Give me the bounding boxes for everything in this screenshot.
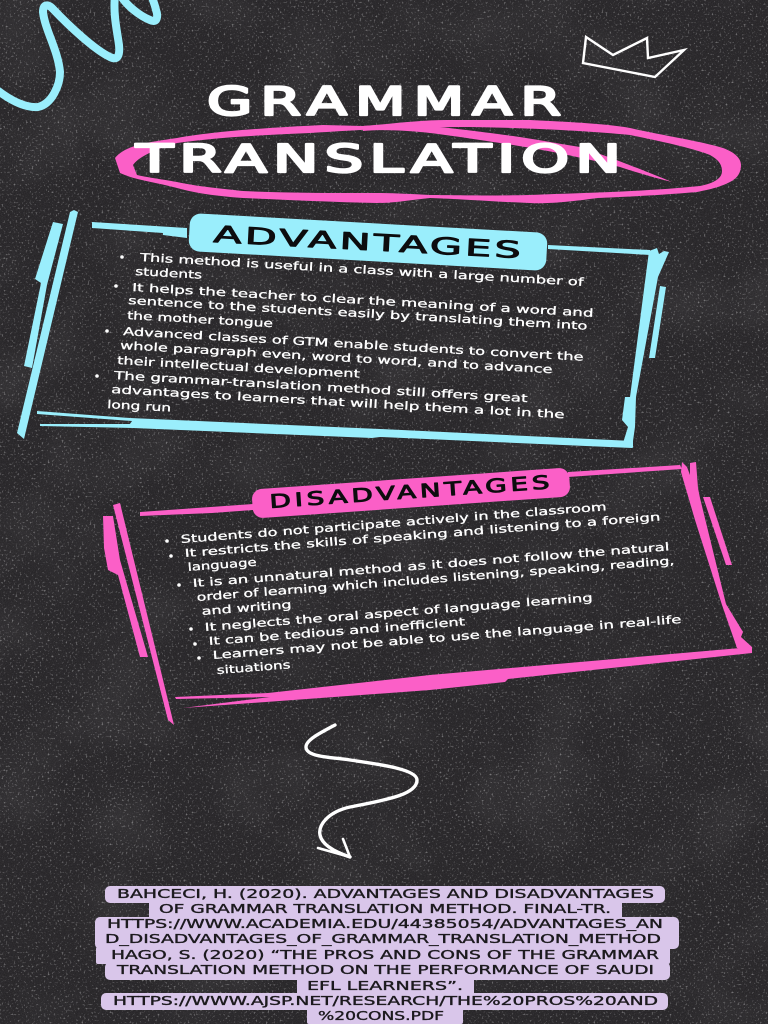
- heading pill: disadvantages: DISADVANTAGES: [269, 471, 550, 513]
- reference text: D_DISADVANTAGES_OF_GRAMMAR_TRANSLATION_METHOD: [105, 932, 661, 946]
- text block: disadvantages list: language: [187, 556, 257, 574]
- icon: cyan scribble: [0, 0, 157, 107]
- text block: advantages list: their intellectual development: [117, 354, 361, 381]
- reference text: [105, 887, 663, 1023]
- reference highlight background: [95, 886, 679, 1024]
- text block: advantages list: the mother tongue: [127, 309, 274, 330]
- text block: disadvantages list: [165, 500, 682, 677]
- reference text: OF GRAMMAR TRANSLATION METHOD. FINAL-TR.: [159, 902, 611, 916]
- text block: disadvantages list: Learners may not be able to use the language in real-life: [212, 613, 682, 662]
- reference text: HAGO, S. (2020) “THE PROS AND CONS OF THE GRAMMAR: [111, 948, 659, 962]
- frame: advantages brush strokes: [17, 210, 669, 448]
- text block: advantages list: advantages to learners that will help them a lot in the: [111, 383, 565, 421]
- text block: advantages list: This method is useful in a class with a large number of: [138, 251, 586, 289]
- text block: disadvantages list: order of learning which includes listening, speaking, reading,: [196, 554, 675, 604]
- text block: disadvantages list: It restricts the skills of speaking and listening to a foreign: [184, 510, 661, 560]
- title ring: pink brush ellipse: [115, 120, 741, 203]
- icon: crown: [583, 37, 684, 77]
- text block: disadvantages list: situations: [216, 658, 291, 677]
- reference text: EFL LEARNERS”.: [307, 979, 463, 993]
- title: GRAMMAR: [207, 79, 561, 124]
- title: [135, 79, 621, 181]
- reference text: HTTPS://WWW.ACADEMIA.EDU/44385054/ADVANTAGES_AN: [107, 917, 663, 931]
- arrow: squiggle pointing to references: [306, 725, 417, 857]
- heading pill: advantages: [188, 213, 548, 271]
- text block: advantages list: [95, 251, 594, 421]
- text block: disadvantages list: It is an unnatural method as it does not follow the natural: [192, 540, 670, 590]
- frame: disadvantages brush strokes: [103, 462, 752, 725]
- reference text: TRANSLATION METHOD ON THE PERFORMANCE OF SAUDI: [115, 963, 654, 977]
- reference text: BAHCECI, H. (2020). ADVANTAGES AND DISADVANTAGES: [117, 887, 654, 901]
- text block: disadvantages list: It can be tedious and inefficient: [208, 615, 466, 648]
- panel: advantages: [17, 210, 669, 448]
- text block: advantages list: It helps the teacher to clear the meaning of a word and: [132, 281, 594, 320]
- references panel: [95, 886, 679, 1024]
- reference text: HTTPS://WWW.AJSP.NET/RESEARCH/THE%20PROS%20AND: [113, 994, 658, 1008]
- text block: disadvantages list: It neglects the oral aspect of language learning: [204, 591, 593, 634]
- text block: advantages list: sentence to the students easily by translating them into: [128, 294, 588, 333]
- text block: advantages list: long run: [107, 398, 171, 415]
- text block: disadvantages list: and writing: [201, 598, 292, 618]
- reference text: %20CONS.PDF: [318, 1009, 444, 1023]
- text block: advantages list: Advanced classes of GTM enable students to convert the: [123, 325, 584, 364]
- heading pill: advantages: ADVANTAGES: [213, 221, 521, 264]
- title: TRANSLATION: [135, 137, 621, 181]
- text block: advantages list: students: [135, 265, 203, 282]
- text block: disadvantages list: Students do not participate actively in the classroom: [180, 500, 607, 546]
- panel: disadvantages: [103, 462, 752, 725]
- text block: advantages list: whole paragraph even, word to word, and to advance: [120, 339, 553, 376]
- text block: advantages list: The grammar-translation method still offers great: [112, 369, 529, 405]
